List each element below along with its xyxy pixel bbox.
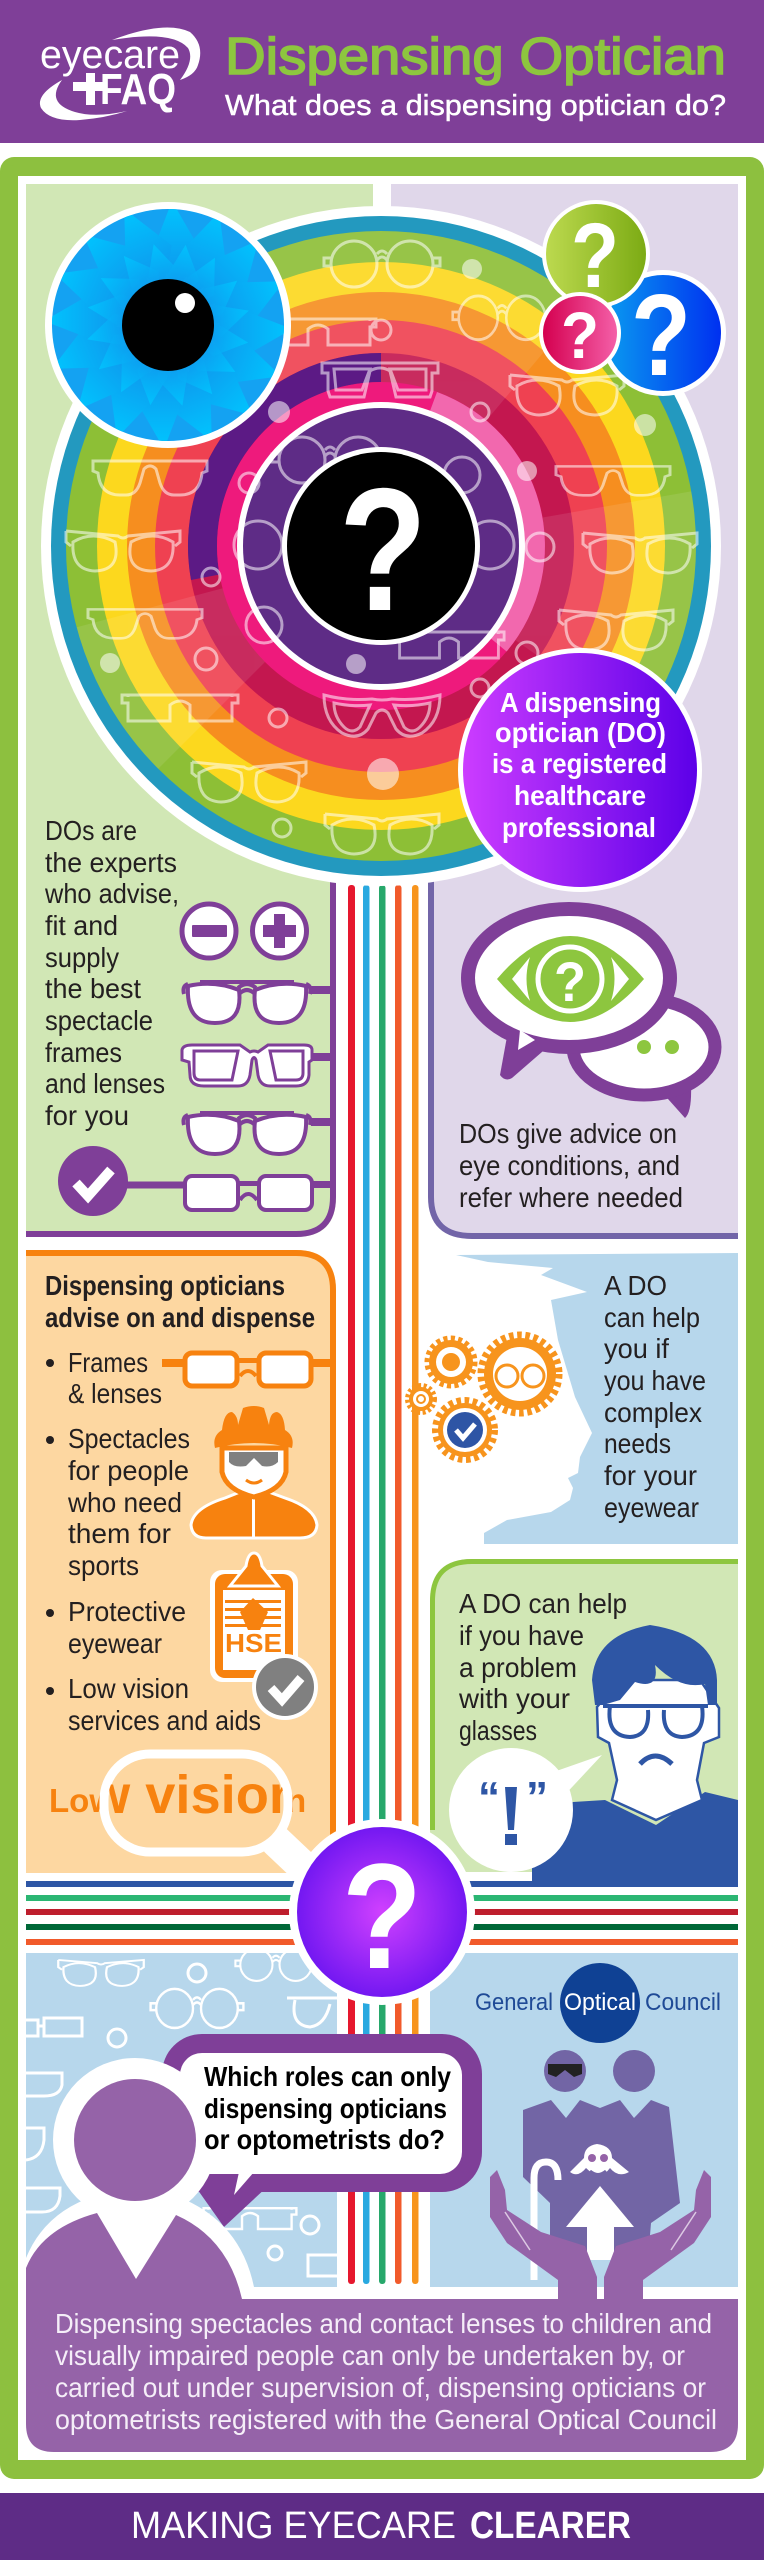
text: A DO can help problem: a problem: [459, 1652, 577, 1683]
text: A DO can help problem: glasses: [459, 1715, 537, 1746]
text: DOs give advice: DOs give advice on: [459, 1118, 677, 1149]
callout: registered healthcare professional: optician (DO): [495, 717, 666, 748]
panel: blue head silhouette: [456, 1253, 738, 1544]
logo: eyecare FAQ: FAQ: [100, 65, 176, 114]
footer text: [131, 2505, 631, 2547]
icon: plus lens: [252, 904, 306, 958]
text: DOs are the experts: fit and: [45, 910, 118, 941]
icon: orange glasses: [162, 1353, 332, 1386]
text: A DO can help problem: A DO can help: [459, 1588, 627, 1619]
heading: dispensing opticians advise: Dispensing opticians: [45, 1270, 285, 1301]
icon: blue question bubble: [600, 270, 726, 400]
text: A DO can help complex needs: you if: [604, 1333, 669, 1364]
centre question circle: ?: [342, 1832, 422, 2000]
text: which roles question: [204, 2061, 451, 2155]
panel border: green: [432, 1562, 738, 1830]
icon: pink question bubble: ?: [561, 298, 599, 372]
panel border: lilac panel: [431, 880, 738, 1236]
text: DOs are the experts: the experts: [45, 847, 177, 878]
icon: minus lens: [182, 904, 236, 958]
text: bullet list: Frames: [68, 1347, 148, 1378]
centre question circle: [289, 1819, 475, 2005]
text: DOs are the experts: supply: [45, 942, 119, 973]
text: DOs are the experts: for you: [45, 1100, 129, 1131]
text: statement: Dispensing spectacles and contact lenses to children and: [55, 2308, 712, 2339]
panel: purple statement: [26, 2299, 738, 2452]
panel border: orange: [26, 1253, 333, 1873]
icon: green question bubble: ?: [571, 205, 619, 307]
icon: low vision magnifier: Low: [49, 1782, 115, 1819]
text: bullet list: Spectacles: [68, 1423, 190, 1454]
horizontal colour stripes: [26, 1881, 738, 1945]
text: which roles question: or optometrists do?: [204, 2124, 445, 2155]
callout: registered healthcare professional: healthcare: [514, 780, 646, 811]
text: DOs give advice: [459, 1118, 683, 1213]
text: bullet list: & lenses: [68, 1378, 162, 1409]
text: A DO can help complex needs: complex: [604, 1397, 702, 1428]
text: A DO can help complex needs: eyewear: [604, 1492, 699, 1523]
text: bullet list: Low vision: [68, 1673, 189, 1704]
text: A DO can help problem: if you have: [459, 1620, 584, 1651]
logo: General Optical Council: Council: [645, 1989, 721, 2016]
callout: registered healthcare professional: is a registered: [492, 748, 667, 779]
heading: dispensing opticians advise: advise on and dispense: [45, 1302, 315, 1333]
icon: blue question bubble: ?: [631, 270, 691, 400]
translucent glasses pattern on rainbow: [66, 241, 697, 854]
icon: pink question bubble: [539, 292, 621, 374]
text: A DO can help complex needs: A DO: [604, 1270, 667, 1301]
text: DOs are the experts: DOs are: [45, 815, 137, 846]
panel: orange advise and dispense: [26, 1250, 336, 1873]
panel: green top left background: [26, 184, 373, 1237]
heading: dispensing opticians advise: [45, 1270, 315, 1333]
panel: lilac top right background: [391, 184, 738, 1239]
icon: large speech bubble with eye: [468, 909, 670, 1079]
panel: blue lower left: [26, 1953, 337, 2287]
vertical colour stripes: [348, 885, 418, 2284]
icon: green question bubble: [542, 200, 650, 308]
text: statement: carried out under supervision of, dispensing opticians or: [55, 2372, 706, 2403]
callout: registered healthcare professional: professional: [502, 812, 656, 843]
icon: worried man with glasses: [532, 1625, 738, 1887]
icon: low vision magnifier: n: [286, 1782, 306, 1819]
text: A DO can help complex needs: [604, 1270, 706, 1523]
icon: people cared for: [523, 2050, 680, 2280]
footer text: CLEARER: [470, 2505, 631, 2547]
icon: person asking: [26, 2058, 254, 2299]
icon: caring hands: [490, 2170, 711, 2299]
icon: purple glasses two: [182, 1045, 331, 1086]
text: bullet list: eyewear: [68, 1628, 162, 1659]
icon: gears: [408, 1336, 558, 1459]
title: Dispensing Optician: [225, 28, 726, 86]
text: A DO can help complex needs: can help: [604, 1302, 700, 1333]
icon: big blue eye: [40, 197, 296, 453]
text: which roles question: dispensing opticians: [204, 2093, 447, 2124]
icon: large speech bubble with eye: ?: [554, 950, 586, 1013]
panel: green problem with glasses: [430, 1559, 738, 1872]
icon: selected square glasses with check: [58, 1146, 331, 1216]
text: A DO can help complex needs: for your: [604, 1460, 697, 1491]
subtitle: What does a dispensing optician do?: [225, 90, 726, 122]
rainbow target circle: [41, 206, 721, 886]
logo: General Optical Council: General: [475, 1989, 553, 2016]
text: which roles question: Which roles can only: [204, 2061, 451, 2092]
text: statement: visually impaired people can only be undertaken by, or: [55, 2340, 685, 2371]
footer band: [0, 2493, 764, 2560]
text: A DO can help complex needs: needs: [604, 1428, 671, 1459]
text: bullet list: who need: [67, 1487, 182, 1518]
panel: blue lower right: [430, 1953, 738, 2287]
logo: eyecare FAQ: eyecare: [40, 33, 180, 77]
callout: registered healthcare professional: [458, 648, 702, 892]
icon: exclamation speech bubble: ”: [526, 1773, 548, 1822]
text: A DO can help problem: [458, 1588, 627, 1746]
logo: General Optical Council: Optical: [564, 1989, 636, 2016]
text: A DO can help complex needs: you have: [604, 1365, 706, 1396]
text: bullet list: services and aids: [68, 1705, 261, 1736]
icon: HSE clipboard: [210, 1553, 298, 1682]
icon: purple glasses one: [184, 982, 331, 1023]
icon: HSE clipboard: HSE: [225, 1628, 282, 1658]
text: DOs are the experts: and lenses: [45, 1068, 165, 1099]
text: statement: [55, 2308, 717, 2435]
logo: eyecare FAQ: [40, 28, 200, 120]
icon: purple glasses three: [184, 1113, 331, 1154]
text: DOs are the experts: spectacle: [45, 1005, 153, 1036]
icon: low vision magnifier: [49, 1754, 312, 1875]
outer green frame: [0, 157, 764, 479]
icon: grey check badge: [252, 1654, 318, 1720]
text: bullet list: [46, 1347, 261, 1736]
icon: exclamation speech bubble: “: [478, 1773, 500, 1822]
text: DOs give advice: eye conditions, and: [459, 1150, 680, 1181]
text: statement: optometrists registered with the General Optical Council: [55, 2404, 717, 2435]
text: bullet list: sports: [68, 1550, 139, 1581]
header band: [0, 0, 764, 143]
text: DOs are the experts: who advise,: [44, 878, 179, 909]
icon: small speech bubble: [573, 999, 715, 1118]
icon: cyclist with helmet: [191, 1406, 317, 1538]
text: bullet list: them for: [68, 1518, 171, 1549]
centre black question circle: ?: [339, 453, 427, 648]
speech bubble: which roles: [162, 2034, 482, 2227]
text: DOs give advice: refer where needed: [459, 1182, 683, 1213]
text: bullet list: for people: [68, 1455, 189, 1486]
text: DOs are the experts: [44, 815, 179, 1131]
panel border: green panel: [26, 880, 333, 1234]
white glasses pattern lower left: [26, 1949, 339, 2276]
callout: registered healthcare professional: A dispensing: [500, 687, 661, 718]
logo: General Optical Council: [475, 1963, 721, 2043]
text: DOs are the experts: frames: [45, 1037, 122, 1068]
footer text: MAKING EYECARE: [131, 2505, 456, 2547]
icon: exclamation speech bubble: [449, 1748, 602, 1872]
text: DOs are the experts: the best: [45, 973, 141, 1004]
text: A DO can help problem: with your: [458, 1683, 570, 1714]
icon: low vision magnifier: w vision: [87, 1765, 302, 1825]
centre black question circle: [282, 447, 480, 648]
text: bullet list: Protective: [68, 1596, 186, 1627]
